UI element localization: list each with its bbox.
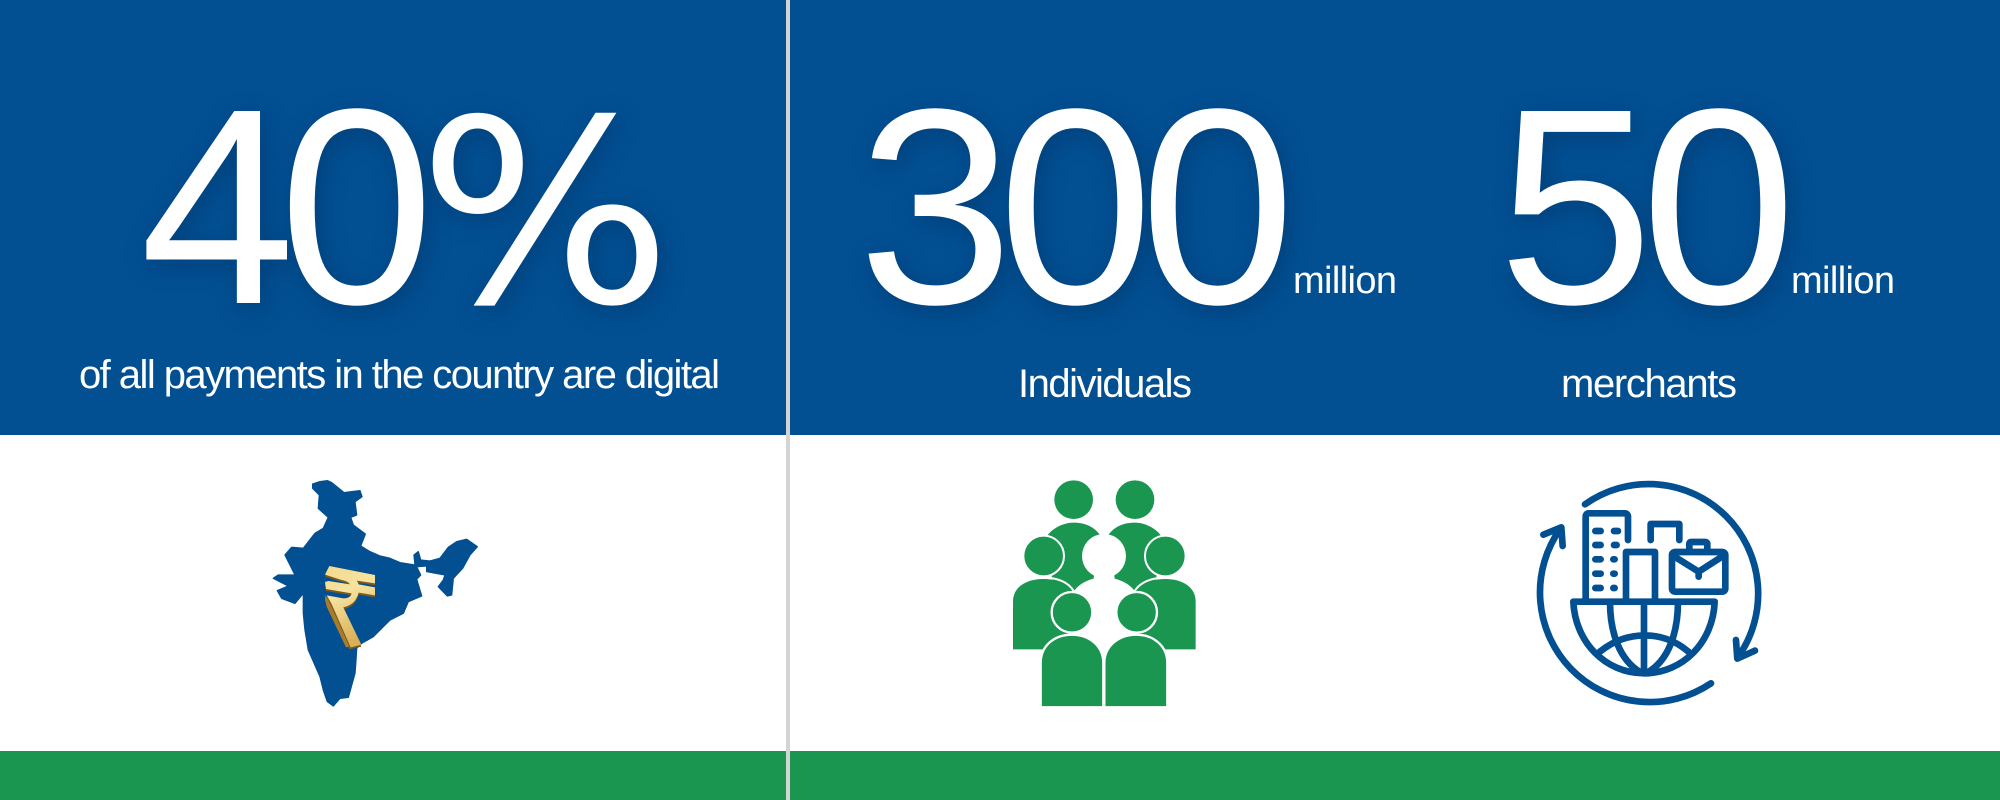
caption: digital payments: of all payments in the country are digital xyxy=(79,353,720,397)
unit: million: million xyxy=(1293,260,1397,302)
icon: group of people xyxy=(1013,480,1196,707)
icon: India map with rupee xyxy=(273,481,477,706)
front row people xyxy=(1041,592,1167,707)
big number: 300: 300 xyxy=(858,51,1295,363)
briefcase xyxy=(1672,542,1725,592)
tall building xyxy=(1586,513,1628,600)
unit: million: million xyxy=(1791,260,1895,302)
caption: merchants: merchants xyxy=(1561,362,1737,406)
circular arrows xyxy=(1540,484,1758,702)
caption: Individuals: Individuals xyxy=(1018,362,1192,406)
big number: 40% xyxy=(140,51,672,363)
blue banner xyxy=(0,0,2000,435)
vertical divider xyxy=(786,0,790,800)
big number: 50: 50 xyxy=(1498,51,1796,363)
icon: globe with buildings and briefcase xyxy=(1540,484,1758,702)
centre white person xyxy=(1073,534,1136,660)
India outline xyxy=(273,481,477,706)
green footer bar xyxy=(0,751,2000,800)
middle row people xyxy=(1013,536,1196,649)
panel: 40 percent statistic xyxy=(79,51,720,397)
panel: 300 million individuals xyxy=(858,51,1397,406)
big number: 40%: % xyxy=(418,66,672,363)
background building xyxy=(1651,524,1679,540)
short building xyxy=(1626,552,1655,600)
globe xyxy=(1573,602,1715,673)
big number: 40%: 40 xyxy=(140,51,434,363)
rupee symbol xyxy=(325,566,375,649)
panel: 50 million merchants xyxy=(1498,51,1895,406)
back row people xyxy=(1043,480,1165,597)
